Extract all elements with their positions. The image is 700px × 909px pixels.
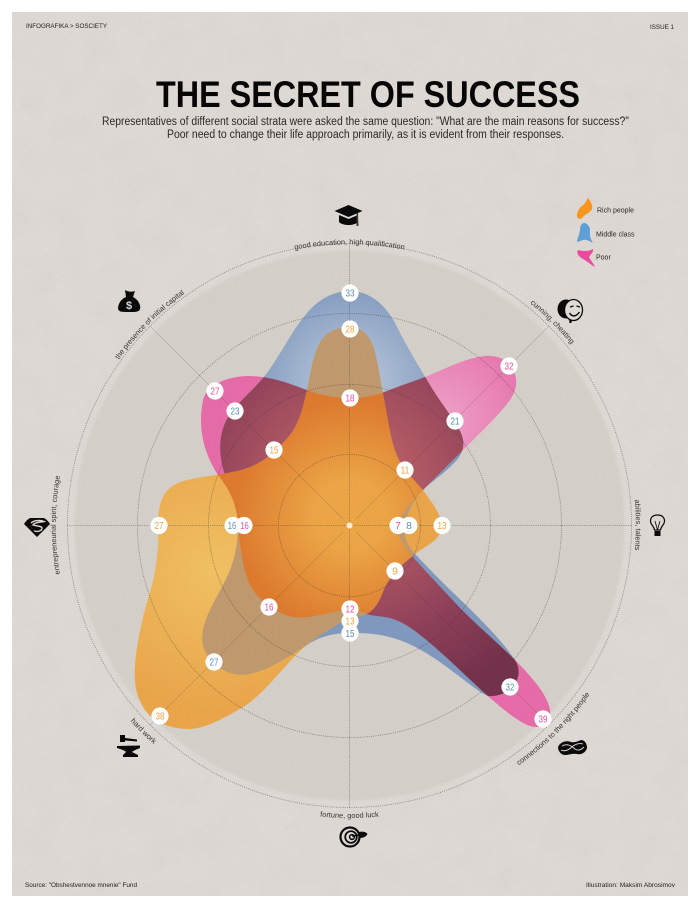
label: entrepreneurial spirit: entrepreneurial spirit, courage [50, 476, 61, 574]
label: hard work: hard work [130, 718, 156, 744]
blob: rich people [135, 327, 441, 729]
centre dot [346, 522, 352, 528]
data points: 9 [392, 567, 398, 578]
illustration credit: Illustration: Maksim Abrosimov [586, 882, 676, 889]
data points: 11 [400, 466, 410, 477]
icon: graduation cap [334, 205, 362, 226]
label: cunning: cunning, cheating [531, 301, 574, 344]
data points: 27 [210, 387, 220, 398]
data points: 28 [346, 325, 355, 336]
data points: 13 [438, 521, 447, 532]
grid: rings and spokes [67, 243, 632, 808]
data points: 38 [156, 712, 165, 723]
data points [150, 284, 552, 728]
label: connections: connections to the right people [517, 692, 590, 765]
data points: 12 [346, 604, 355, 615]
label: abilities: abilities, talents [634, 500, 642, 550]
data points: 27 [154, 521, 164, 532]
data points: 16 [264, 603, 274, 614]
icon: money bag [118, 290, 140, 312]
axis labels [50, 239, 642, 820]
data points: 23 [230, 407, 240, 418]
data points: 32 [504, 362, 514, 373]
icon: anvil and hammer [117, 735, 140, 757]
blob: poor [201, 356, 550, 727]
legend: poor: Poor [596, 254, 611, 262]
issue breadcrumb: INFOGRAFIKA > SOSCIETY [26, 23, 108, 30]
data points: 13 [346, 617, 355, 628]
label: initial capital: the presence of initial capital [115, 290, 184, 359]
label: good education: good education, high qualification [294, 239, 404, 251]
subtitle: Poor need to change their life approach primarily, as it is evident from their responses. [167, 129, 564, 141]
data points: 15 [270, 446, 279, 457]
overlap: rich and poor core [218, 390, 423, 618]
icon: light bulb [650, 515, 664, 536]
blob: middle class [202, 291, 519, 696]
label: fortune: fortune, good luck [320, 811, 379, 820]
issue number: ISSUE 1 [650, 24, 674, 31]
data points: 16 [228, 521, 237, 532]
polar chart backdrop disk [74, 250, 624, 800]
overlap: rich and middle class [202, 328, 422, 675]
data points: 32 [506, 683, 515, 694]
title: THE SECRET OF SUCCESS [156, 73, 580, 115]
legend: rich people: Rich people [597, 208, 634, 214]
subtitle: Representatives of different social strata were asked the same question: "What are the main reasons for success?" [102, 116, 629, 128]
icon: money bag: $ [126, 300, 132, 312]
data points: 8 [406, 521, 412, 532]
radar chart blobs [135, 291, 550, 729]
data points: 27 [210, 658, 219, 669]
icon: theatre mask [558, 300, 582, 323]
data points: 7 [395, 521, 401, 532]
data points: 21 [450, 417, 460, 428]
icon: superman shield [24, 518, 50, 537]
overlap: poor and middle class [220, 377, 519, 696]
icon: knot [558, 740, 587, 755]
data points: 18 [346, 394, 355, 405]
icon: target with dart [340, 828, 368, 846]
data points: 39 [538, 715, 548, 726]
data points: 33 [346, 289, 355, 300]
subtitle [102, 116, 629, 141]
legend [577, 198, 635, 267]
data points: 15 [346, 629, 355, 640]
data points: 16 [240, 521, 249, 532]
source credit: Source: "Obshestvennoe mnenie" Fund [25, 882, 137, 889]
legend: middle class: Middle class [596, 232, 635, 238]
